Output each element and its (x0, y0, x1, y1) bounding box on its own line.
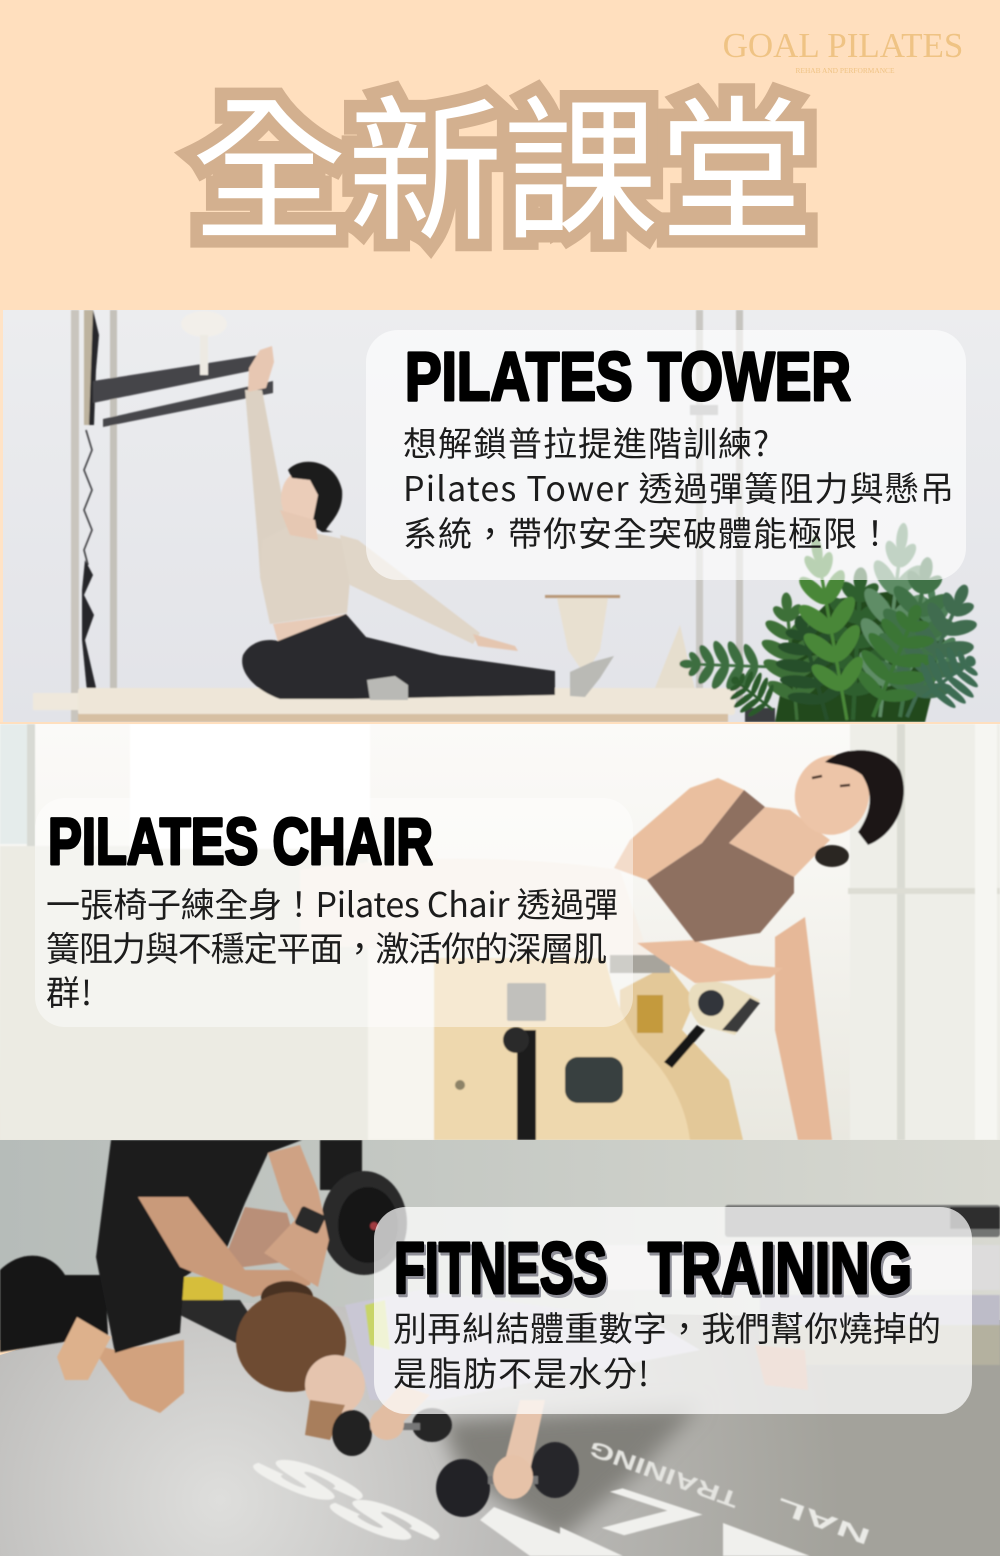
heading: Fitness Training: FITNESS (396, 1232, 609, 1312)
body text: Pilates Chair: 群! (46, 966, 93, 1015)
floor graphic lettering: SS (224, 1456, 469, 1544)
photo: trainer and woman with dumbbells (0, 1140, 1000, 1556)
panel: Fitness Training (0, 1140, 1000, 1556)
heading: Fitness Training (394, 1229, 914, 1312)
heading: Pilates Chair: PILATES CHAIR (48, 804, 433, 878)
floor graphic lettering: TRAINING (586, 1436, 742, 1513)
header band (0, 0, 1000, 310)
text card: Fitness Training (374, 1207, 972, 1414)
text card: Pilates Chair (35, 798, 633, 1027)
heading: Pilates Tower: PILATES TOWER (405, 338, 851, 415)
title: 全新課堂 (191, 46, 815, 272)
heading: Fitness Training: FITNESS (394, 1229, 607, 1309)
heading: Fitness Training: TRAINING (648, 1229, 912, 1309)
photo: woman stretching on tower (0, 310, 1000, 732)
logo: Goal Pilates: GOAL PILATES (723, 26, 963, 65)
body text: Pilates Chair: 簧阻力與不穩定平面，激活你的深層肌 (46, 922, 608, 971)
heading: Fitness Training: TRAINING (650, 1232, 914, 1312)
icon: plant (678, 522, 979, 722)
floor graphic lettering: NAL (773, 1493, 874, 1550)
body text: Pilates Tower: Pilates Tower 透過彈簧阻力與懸吊 (403, 462, 955, 511)
body text: Fitness Training: 別再糾結體重數字，我們幫你燒掉的 (393, 1302, 942, 1351)
body text: Pilates Tower: 想解鎖普拉提進階訓練? (403, 417, 770, 466)
body text: Pilates Chair (46, 878, 619, 1015)
body text: Pilates Tower: 系統，帶你安全突破體能極限！ (403, 507, 893, 556)
floor graphic lettering (224, 1436, 874, 1556)
logo: Goal Pilates: REHAB AND PERFORMANCE (796, 66, 895, 75)
text card: Pilates Tower (366, 330, 966, 580)
floor graphic lettering: L (516, 1480, 738, 1545)
body text: Fitness Training: 是脂肪不是水分! (393, 1347, 650, 1396)
panel: Pilates Chair (0, 724, 1000, 1140)
panel: Pilates Tower (0, 310, 1000, 732)
body text: Pilates Tower (403, 417, 955, 556)
photo: woman on pilates chair (0, 724, 1000, 1140)
body text: Pilates Chair: 一張椅子練全身！Pilates Chair 透過彈 (46, 878, 619, 927)
body text: Fitness Training (393, 1302, 942, 1396)
